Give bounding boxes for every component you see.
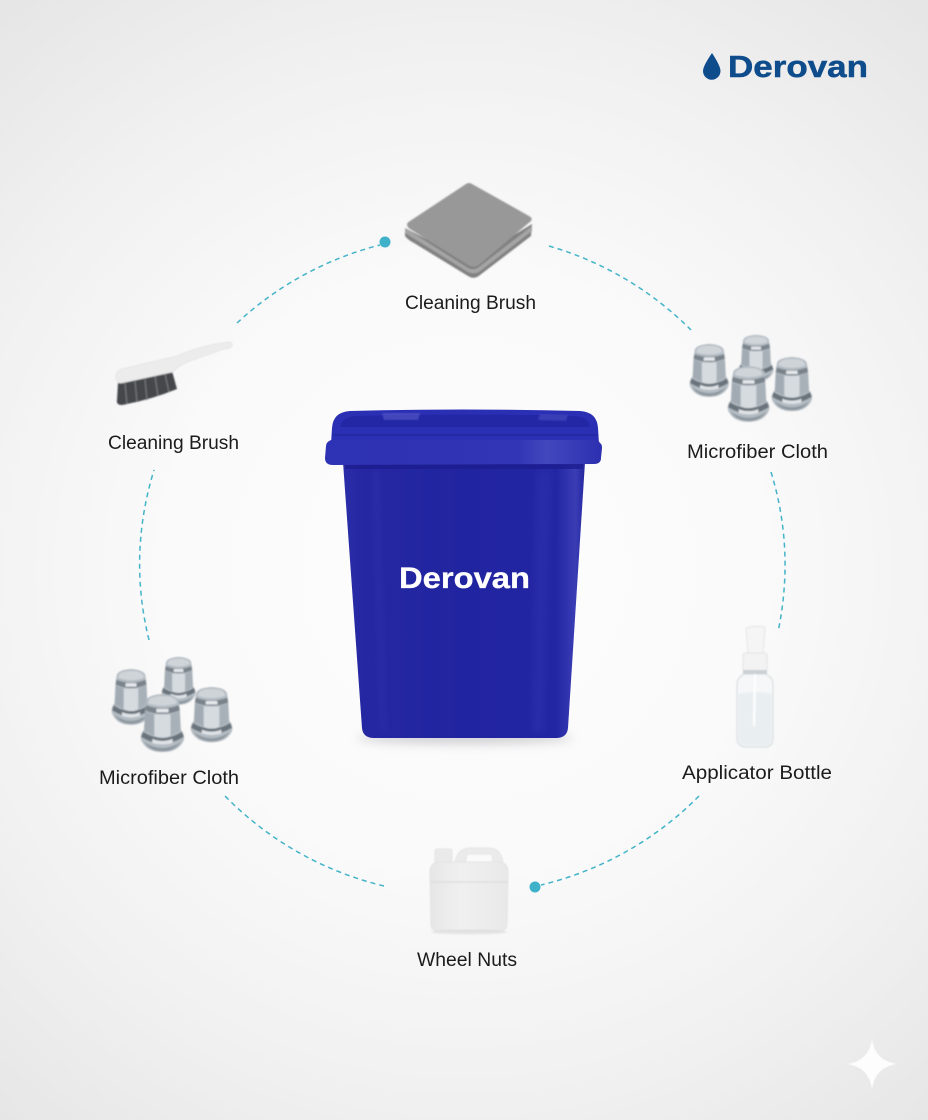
item: folded cloth [405, 183, 536, 314]
icon: water drop [703, 53, 720, 80]
logo: Derovan [703, 49, 868, 84]
jug illustration [430, 848, 508, 934]
bucket body highlights [372, 470, 386, 732]
bucket shadow [357, 732, 573, 744]
bucket label: Derovan [399, 562, 530, 595]
arrow: brush to cloth [237, 245, 380, 323]
jug label: Wheel Nuts [417, 950, 517, 971]
item: wheel nuts left [99, 657, 239, 789]
item: wheel nuts top right [687, 335, 828, 463]
bucket lid inner [340, 414, 590, 427]
nuts label: Microfiber Cloth [99, 768, 239, 789]
item: cleaning brush [108, 342, 239, 454]
brush illustration [116, 342, 232, 405]
bucket [325, 410, 602, 744]
connector dot top [380, 236, 390, 248]
nuts illustration [690, 335, 812, 422]
brush label: Cleaning Brush [108, 433, 239, 454]
arrow: cloth to nuts [549, 246, 691, 330]
item: spray bottle [682, 626, 832, 784]
dashed connector ring [140, 245, 785, 886]
bucket lid top [331, 410, 599, 444]
logo wordmark: Derovan [728, 49, 868, 84]
arrow: jug to nuts [225, 796, 384, 886]
item: plastic jug [417, 848, 517, 971]
bucket rim [325, 440, 602, 465]
icon: sparkle watermark [847, 1039, 897, 1089]
bottle label: Applicator Bottle [682, 763, 832, 784]
nuts label: Microfiber Cloth [687, 442, 828, 463]
arrow: nuts to brush [140, 470, 154, 640]
cloth illustration [405, 183, 532, 278]
connector dot bottom [530, 882, 540, 892]
arrow: nuts to bottle [771, 472, 785, 632]
cloth label: Cleaning Brush [405, 293, 536, 314]
arrow: bottle to jug [541, 796, 699, 885]
bottle illustration [737, 626, 773, 747]
nuts illustration [112, 657, 232, 752]
bucket body [343, 462, 585, 738]
